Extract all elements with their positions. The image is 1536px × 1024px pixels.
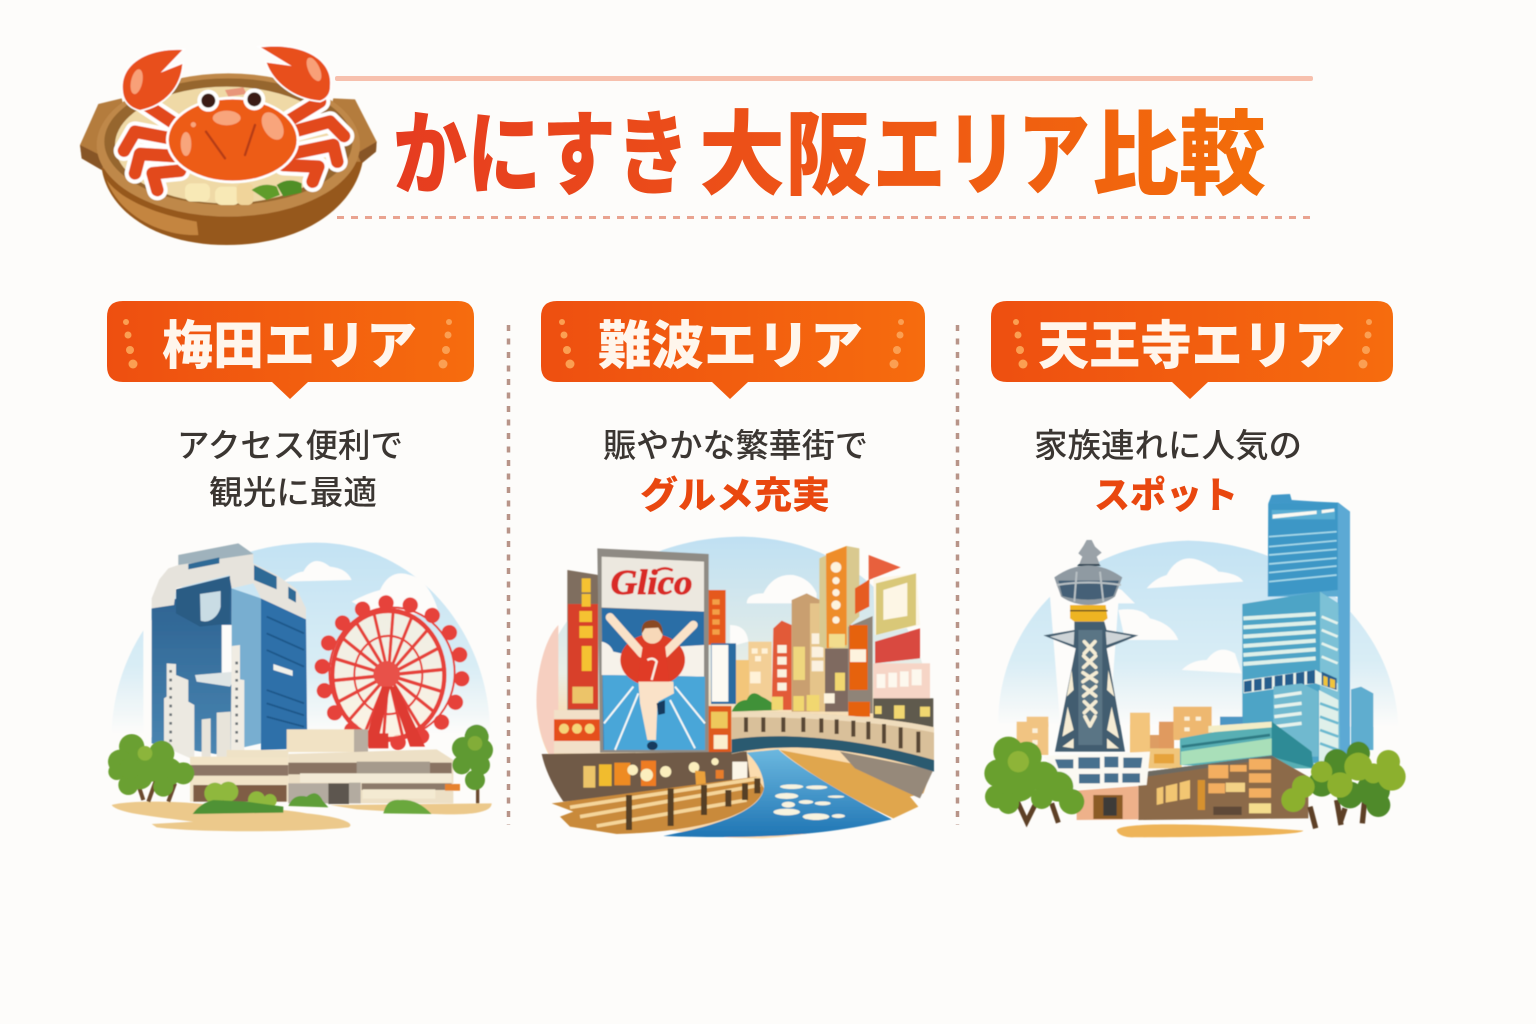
heading badge: Namba xyxy=(541,301,925,399)
Tennoji Mio building xyxy=(1138,722,1315,820)
claw highlights xyxy=(128,55,324,95)
illustration: Tsutenkaku and Abeno Harukas xyxy=(984,494,1406,837)
description: Namba xyxy=(603,419,868,519)
trees, left xyxy=(984,737,1084,823)
broth and ingredients xyxy=(115,87,338,205)
trees, right xyxy=(1281,742,1406,828)
heading badge: Umeda: 梅田エリア xyxy=(162,304,417,379)
crab eyes xyxy=(197,88,265,112)
Umeda Sky Building xyxy=(152,543,307,760)
header rule: top line xyxy=(335,76,1313,81)
icon: crab in clay hot pot xyxy=(80,47,377,245)
left pink wash xyxy=(536,625,558,760)
crab legs xyxy=(124,102,344,190)
pot rim xyxy=(97,73,360,217)
river xyxy=(663,749,892,837)
Glico billboard xyxy=(597,548,709,753)
heading badge: Umeda xyxy=(107,301,474,399)
background low buildings xyxy=(1017,707,1212,768)
title: かにすき xyxy=(393,81,690,214)
Tsutenkaku tower xyxy=(1043,540,1150,820)
street-level shops xyxy=(542,752,750,802)
title: 比較 xyxy=(1092,81,1266,214)
sky xyxy=(112,543,490,733)
clouds xyxy=(747,575,817,603)
panel: Namba area xyxy=(536,301,934,838)
description: Tennoji: 家族連れに人気の xyxy=(1034,419,1302,467)
crab body xyxy=(169,99,297,181)
crab legs outline xyxy=(124,102,344,190)
clouds xyxy=(1050,558,1243,743)
low-rise buildings xyxy=(190,729,460,804)
description: Umeda: 観光に最適 xyxy=(209,466,377,514)
water reflections xyxy=(773,784,845,820)
pot handles xyxy=(80,98,377,170)
divider lines xyxy=(508,325,958,825)
heading badge: Namba: 難波エリア xyxy=(598,304,863,379)
sky xyxy=(537,537,930,838)
bridge xyxy=(732,712,934,772)
title: 大阪 xyxy=(699,81,871,214)
clouds xyxy=(143,561,440,737)
illustration: Dotonbori with Glico sign xyxy=(536,537,934,838)
riverside buildings, left xyxy=(554,570,736,755)
pot inner wall xyxy=(104,78,352,205)
description: Namba: 賑やかな繁華街で xyxy=(603,419,868,467)
title xyxy=(393,81,1266,214)
heading badge: Tennoji: 天王寺エリア xyxy=(1038,304,1345,379)
description: Umeda: アクセス便利で xyxy=(177,419,403,467)
description: Namba: グルメ充実 xyxy=(640,465,830,519)
Glico runner xyxy=(610,617,693,750)
right claw xyxy=(261,47,330,101)
illustration: Umeda Sky Building and ferris wheel xyxy=(108,543,493,831)
description: Tennoji: スポット xyxy=(1094,465,1238,519)
crab shell marks xyxy=(181,108,288,158)
right side buildings xyxy=(772,546,933,728)
description: Tennoji xyxy=(1034,419,1302,519)
far embankment wall xyxy=(840,752,933,798)
distant buildings xyxy=(730,625,780,712)
panel: Umeda area xyxy=(107,301,493,831)
sky xyxy=(998,541,1398,727)
title: エリア xyxy=(873,81,1090,214)
pot speckled highlight xyxy=(107,180,198,235)
ferris wheel xyxy=(316,597,468,748)
Abeno Harukas tower xyxy=(1220,494,1373,763)
sand ground xyxy=(1117,824,1303,837)
pot bowl xyxy=(102,162,363,245)
promenade xyxy=(552,777,764,834)
far river bank xyxy=(780,750,932,818)
header rule: dashed line xyxy=(337,216,1315,219)
trees and shrubs xyxy=(108,725,493,814)
description: Umeda xyxy=(177,419,403,514)
sand ground xyxy=(112,802,492,831)
heading badge: Tennoji xyxy=(991,301,1393,399)
left claw xyxy=(123,50,182,110)
panel: Tennoji area xyxy=(984,301,1406,837)
Glico billboard: Glico xyxy=(611,564,692,602)
